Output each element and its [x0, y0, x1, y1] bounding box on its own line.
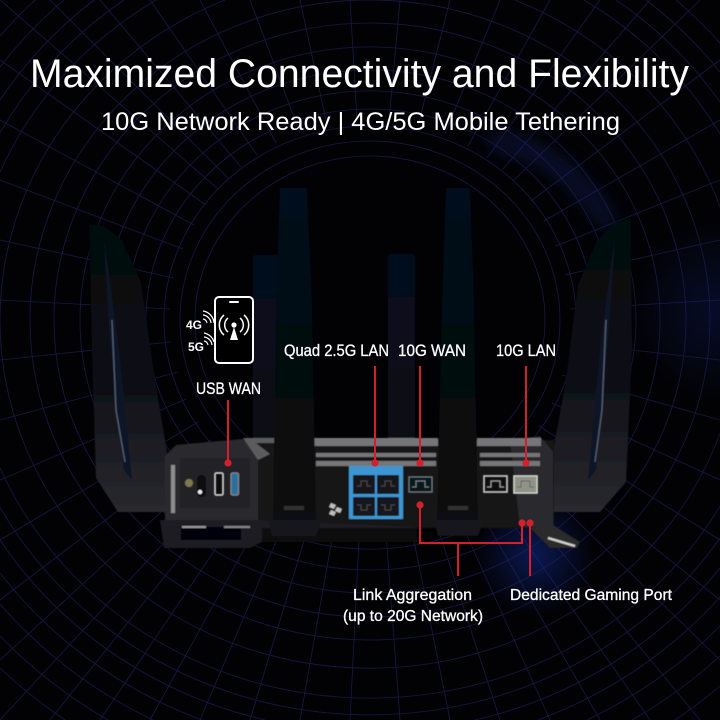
power connector and switch — [185, 475, 206, 497]
icon: phone with 4G and 5G: 4G — [186, 318, 202, 332]
icon: phone with 4G and 5G: 5G — [188, 340, 204, 354]
10G WAN port — [409, 477, 432, 492]
line: 10G LAN — [523, 366, 529, 466]
line: USB WAN — [225, 400, 231, 466]
line: Quad 2.5G LAN — [372, 366, 378, 466]
subtitle: 10G Network Ready | 4G/5G Mobile Tethering — [101, 108, 620, 136]
label: Link Aggregation: Link Aggregation — [353, 587, 472, 604]
vent bars left — [313, 438, 438, 466]
title: Maximized Connectivity and Flexibility — [30, 52, 689, 96]
left outer antenna — [89, 224, 167, 512]
label: Dedicated Gaming Port: Dedicated Gaming Port — [510, 587, 673, 604]
label: 10G LAN: 10G LAN — [496, 341, 556, 360]
logo mark — [329, 503, 342, 516]
router — [89, 188, 632, 548]
label: up to 20G Network: (up to 20G Network) — [343, 608, 483, 625]
line: Link Aggregation bracket — [417, 502, 525, 576]
usb ports — [215, 473, 238, 495]
back antennas — [253, 254, 415, 445]
callout lines — [225, 366, 533, 576]
label: 10G WAN: 10G WAN — [398, 341, 466, 360]
right outer antenna — [553, 218, 632, 512]
vent bars right — [477, 438, 541, 466]
icon: phone with 4G and 5G — [186, 297, 253, 363]
router body — [160, 436, 580, 548]
line: Dedicated Gaming Port — [527, 520, 533, 576]
10G port pair — [484, 476, 537, 493]
label: Quad 2.5G LAN: Quad 2.5G LAN — [284, 341, 389, 360]
label: USB WAN: USB WAN — [196, 379, 261, 398]
line: 10G WAN — [417, 366, 423, 466]
quad 2.5G LAN ports — [349, 466, 403, 519]
center tall antennas — [268, 188, 484, 536]
